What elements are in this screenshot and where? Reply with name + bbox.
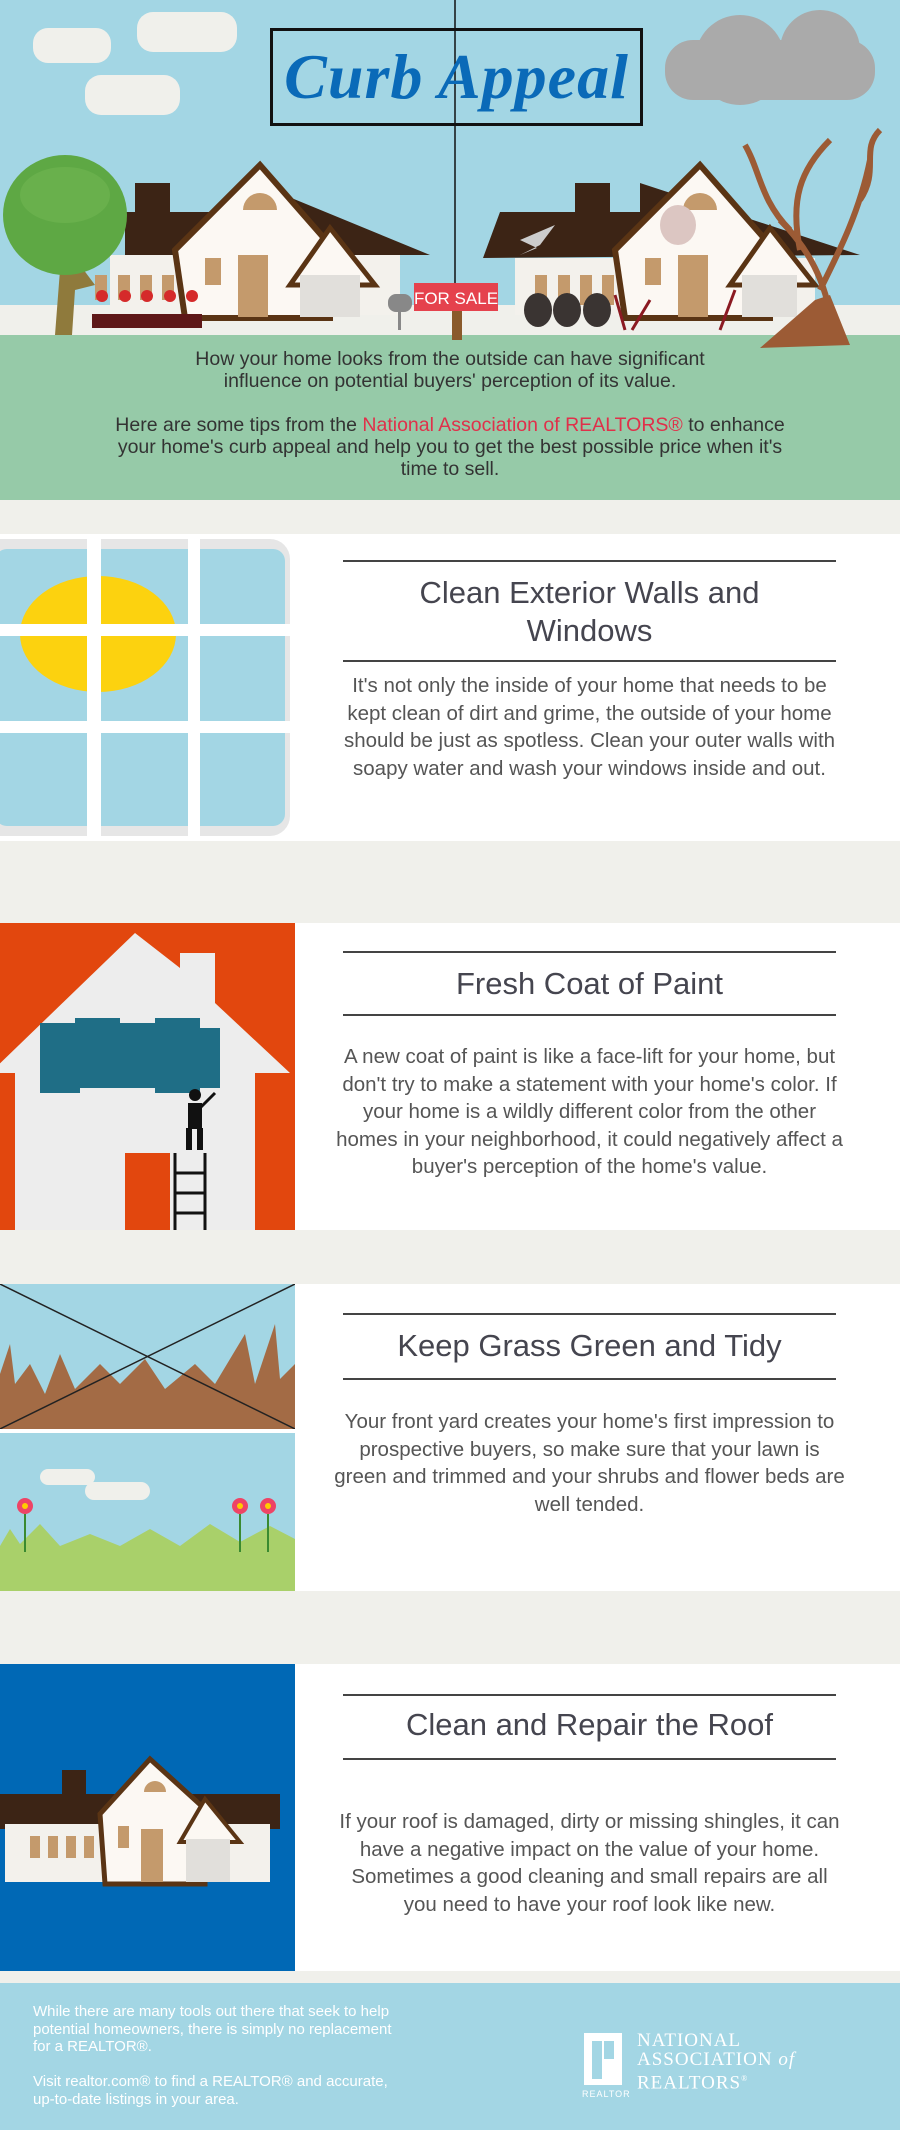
- intro text: influence on potential buyers' perception of its value.: [224, 370, 676, 392]
- text: clean walls: [343, 560, 836, 780]
- panel: paint: [0, 923, 900, 1230]
- footer text: While there are many tools out there that seek to help potential homeowners, there is simply no replacement for a REALTOR®.: [33, 2003, 392, 2055]
- logo: NAR: REALTORS®: [637, 2072, 748, 2093]
- panel: roof: [0, 1664, 900, 1971]
- text: roof: Clean and Repair the Roof: [406, 1707, 773, 1742]
- clouds: [33, 12, 237, 115]
- icon: house painting: [0, 923, 295, 1230]
- text: grass: [334, 1313, 845, 1516]
- text: paint: Fresh Coat of Paint: [456, 966, 723, 1001]
- text: grass: Your front yard creates your home's first impression to prospective buyers, so make sure that your lawn is green and trimmed and your shrubs and flower beds are well tended.: [334, 1410, 845, 1516]
- house left: [92, 165, 430, 328]
- text: grass: Keep Grass Green and Tidy: [397, 1328, 782, 1363]
- text: paint: [336, 951, 843, 1178]
- intro text: [115, 348, 785, 480]
- logo: NAR: REALTOR: [582, 2089, 631, 2099]
- logo: NAR: ASSOCIATION of: [637, 2049, 795, 2070]
- text: clean walls: Clean Exterior Walls and: [420, 575, 760, 610]
- text: paint: A new coat of paint is like a face-lift for your home, but don't try to make a statement with your home's color. If your home is a wildly different color from the other homes in your neighborhood, it could negatively affect a buyer's perception of the home's value.: [336, 1045, 843, 1178]
- logo: NAR: NATIONAL: [637, 2030, 741, 2051]
- icon: window: [0, 539, 290, 836]
- intro text: time to sell.: [401, 458, 499, 480]
- intro text: How your home looks from the outside can have significant: [195, 348, 705, 370]
- text: clean walls: It's not only the inside of your home that needs to be kept clean of dirt and grime, the outside of your home should be just as spotless. Clean your outer walls with soapy water and wash your windows inside and out.: [344, 674, 835, 780]
- intro text: Here are some tips from the National Association of REALTORS® to enhance: [115, 414, 785, 436]
- for sale sign: FOR SALE: [414, 289, 498, 308]
- text: roof: [339, 1694, 840, 1916]
- footer: [0, 1983, 900, 2130]
- title box: Curb Appeal: [284, 41, 629, 112]
- icon: lawn: [0, 1284, 295, 1591]
- panel: grass: [0, 1284, 900, 1591]
- for sale sign: [388, 283, 498, 340]
- house right: [483, 165, 860, 330]
- footer text: Visit realtor.com® to find a REALTOR® and accurate, up-to-date listings in your area.: [33, 2073, 388, 2108]
- footer text: [33, 2003, 392, 2108]
- logo: NAR: [582, 2030, 796, 2099]
- intro text: your home's curb appeal and help you to get the best possible price when it's: [118, 436, 782, 458]
- text: clean walls: Windows: [527, 613, 652, 648]
- icon: house: [0, 1664, 295, 1971]
- dead tree: [745, 130, 880, 345]
- panel: clean walls: [0, 534, 900, 841]
- tree left: [3, 155, 127, 335]
- title box: [270, 28, 643, 126]
- text: roof: If your roof is damaged, dirty or missing shingles, it can have a negative impact on the value of your home. Sometimes a good cleaning and small repairs are all you need to have your roof look like new.: [339, 1810, 840, 1916]
- header scene: [0, 0, 900, 500]
